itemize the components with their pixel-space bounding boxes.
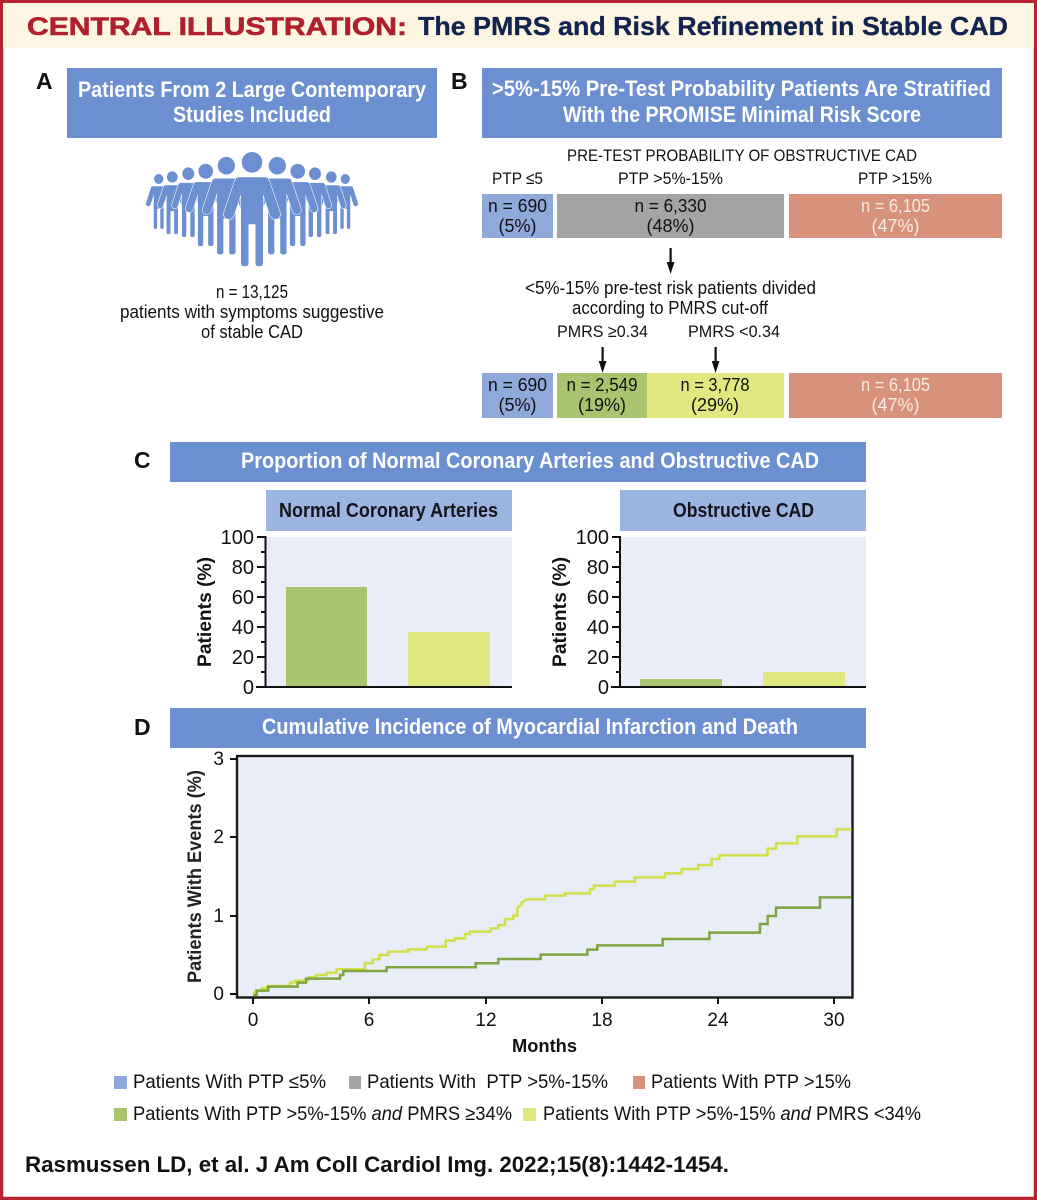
label C: C [134, 447, 151, 473]
legend: PTP 5% to 15%: Patients With PTP >5%-15% [367, 1071, 608, 1093]
legend: PTP above 15%: Patients With PTP >15% [651, 1071, 851, 1093]
PMRS division text: PMRS ≥0.34 [557, 322, 648, 341]
label B: B [451, 68, 468, 94]
bottom stratification bar: n = 2,549 [566, 375, 638, 395]
bottom stratification bar: n = 690 [488, 375, 547, 395]
bar chart: obstructive CAD: 20 [587, 647, 609, 669]
top stratification bar: n = 6,105 [861, 196, 930, 216]
label A: A [36, 68, 53, 94]
line chart: cumulative incidence: 0 [248, 1010, 258, 1031]
title band: The PMRS and Risk Refinement in Stable CAD [418, 11, 1008, 41]
bar chart: normal coronary arteries: Patients (%) [195, 557, 216, 667]
PMRS division text: according to PMRS cut-off [572, 298, 769, 318]
icon: crowd of patients [146, 152, 358, 266]
line chart: cumulative incidence: 30 [823, 1010, 845, 1031]
line chart: cumulative incidence: 12 [475, 1010, 497, 1031]
label D: D [134, 714, 151, 740]
pre-test probability headings: PRE-TEST PROBABILITY OF OBSTRUCTIVE CAD [567, 146, 917, 165]
top stratification bar [482, 194, 1002, 238]
pre-test probability headings: PTP >15% [858, 169, 932, 188]
PMRS division text: <5%-15% pre-test risk patients divided [525, 278, 816, 298]
bar chart: normal coronary arteries: 80 [232, 557, 254, 579]
line chart: cumulative incidence: 2 [213, 827, 224, 848]
line chart: cumulative incidence [185, 749, 852, 1056]
legend [114, 1071, 921, 1125]
panel C [134, 442, 866, 699]
bar chart: normal coronary arteries: 0 [243, 677, 254, 699]
bar chart: obstructive CAD: Patients (%) [550, 557, 571, 667]
PMRS division text: PMRS <0.34 [688, 322, 780, 341]
legend: PMRS at or above 34%: Patients With PTP >5%-15% and PMRS ≥34% [133, 1103, 512, 1125]
bar chart: normal coronary arteries: Normal Coronary Arteries [279, 500, 498, 522]
bar chart: normal coronary arteries: 60 [232, 587, 254, 609]
bottom stratification bar [482, 373, 1002, 418]
bar chart: normal coronary arteries [195, 490, 512, 699]
bar chart: obstructive CAD [550, 490, 866, 699]
line chart: cumulative incidence: 0 [213, 984, 224, 1005]
line chart: cumulative incidence: 18 [591, 1010, 613, 1031]
bottom stratification bar: n = 3,778 [680, 375, 750, 395]
bottom stratification bar: (29%) [691, 395, 739, 415]
bar chart: obstructive CAD: Obstructive CAD [673, 500, 814, 522]
panel B heading: >5%-15% Pre-Test Probability Patients Are Stratified [492, 76, 991, 101]
legend: PMRS below 34%: Patients With PTP >5%-15% and PMRS <34% [543, 1103, 921, 1125]
citation: Rasmussen LD, et al. J Am Coll Cardiol Img. 2022;15(8):1442-1454. [25, 1152, 729, 1177]
bottom stratification bar: (5%) [498, 395, 537, 415]
line chart: cumulative incidence: 24 [707, 1010, 729, 1031]
title band [3, 3, 1034, 48]
top stratification bar: (47%) [871, 216, 920, 236]
top stratification bar: n = 690 [488, 196, 547, 216]
panel A heading: Patients From 2 Large Contemporary [78, 77, 426, 102]
panel D heading [170, 708, 866, 748]
pre-test probability headings [492, 146, 932, 188]
bottom stratification bar: (19%) [578, 395, 626, 415]
bottom stratification bar: n = 6,105 [861, 375, 930, 395]
panel A [36, 68, 437, 342]
bar chart: obstructive CAD: 100 [576, 527, 609, 549]
bar chart: obstructive CAD: 60 [587, 587, 609, 609]
curve: PMRS below cut-off [253, 829, 852, 994]
bar chart: normal coronary arteries: 20 [232, 647, 254, 669]
bar chart: obstructive CAD: 0 [598, 677, 609, 699]
bar chart: normal coronary arteries: 40 [232, 617, 254, 639]
patient count text: patients with symptoms suggestive [120, 302, 384, 322]
line chart: cumulative incidence: 6 [364, 1010, 374, 1031]
top stratification bar: (48%) [646, 216, 695, 236]
panel B [451, 68, 1002, 418]
patient count text [120, 282, 384, 342]
PMRS division text [525, 278, 816, 341]
arrow: down to PMRS division [667, 248, 674, 274]
panel B heading: With the PROMISE Minimal Risk Score [563, 102, 921, 127]
panel A heading: Studies Included [173, 102, 331, 127]
patient count text: n = 13,125 [216, 282, 288, 302]
bar chart: obstructive CAD: 40 [587, 617, 609, 639]
pre-test probability headings: PTP ≤5 [492, 169, 543, 188]
line chart: cumulative incidence: 3 [213, 749, 224, 770]
panel B heading [482, 68, 1002, 138]
title band: CENTRAL ILLUSTRATION: [27, 13, 407, 41]
bar chart: obstructive CAD: 80 [587, 557, 609, 579]
arrow: PMRS low [712, 347, 720, 373]
line chart: cumulative incidence: Patients With Events (%) [185, 770, 206, 983]
top stratification bar: (5%) [498, 216, 537, 236]
curve: PMRS at or above cut-off [253, 897, 852, 995]
bar chart: normal coronary arteries: 100 [221, 527, 254, 549]
line chart: cumulative incidence: 1 [213, 906, 224, 927]
panel A heading [67, 68, 437, 138]
pre-test probability headings: PTP >5%-15% [618, 169, 723, 188]
panel C heading [170, 442, 866, 482]
patient count text: of stable CAD [201, 322, 303, 342]
bottom stratification bar: (47%) [871, 395, 920, 415]
arrow: PMRS high [599, 347, 606, 373]
panel C heading: Proportion of Normal Coronary Arteries and Obstructive CAD [241, 448, 819, 473]
legend: PTP up to 5%: Patients With PTP ≤5% [133, 1071, 326, 1093]
top stratification bar: n = 6,330 [634, 196, 706, 216]
panel D [134, 708, 866, 1056]
line chart: cumulative incidence: Months [512, 1036, 577, 1056]
panel D heading: Cumulative Incidence of Myocardial Infarction and Death [262, 714, 798, 739]
